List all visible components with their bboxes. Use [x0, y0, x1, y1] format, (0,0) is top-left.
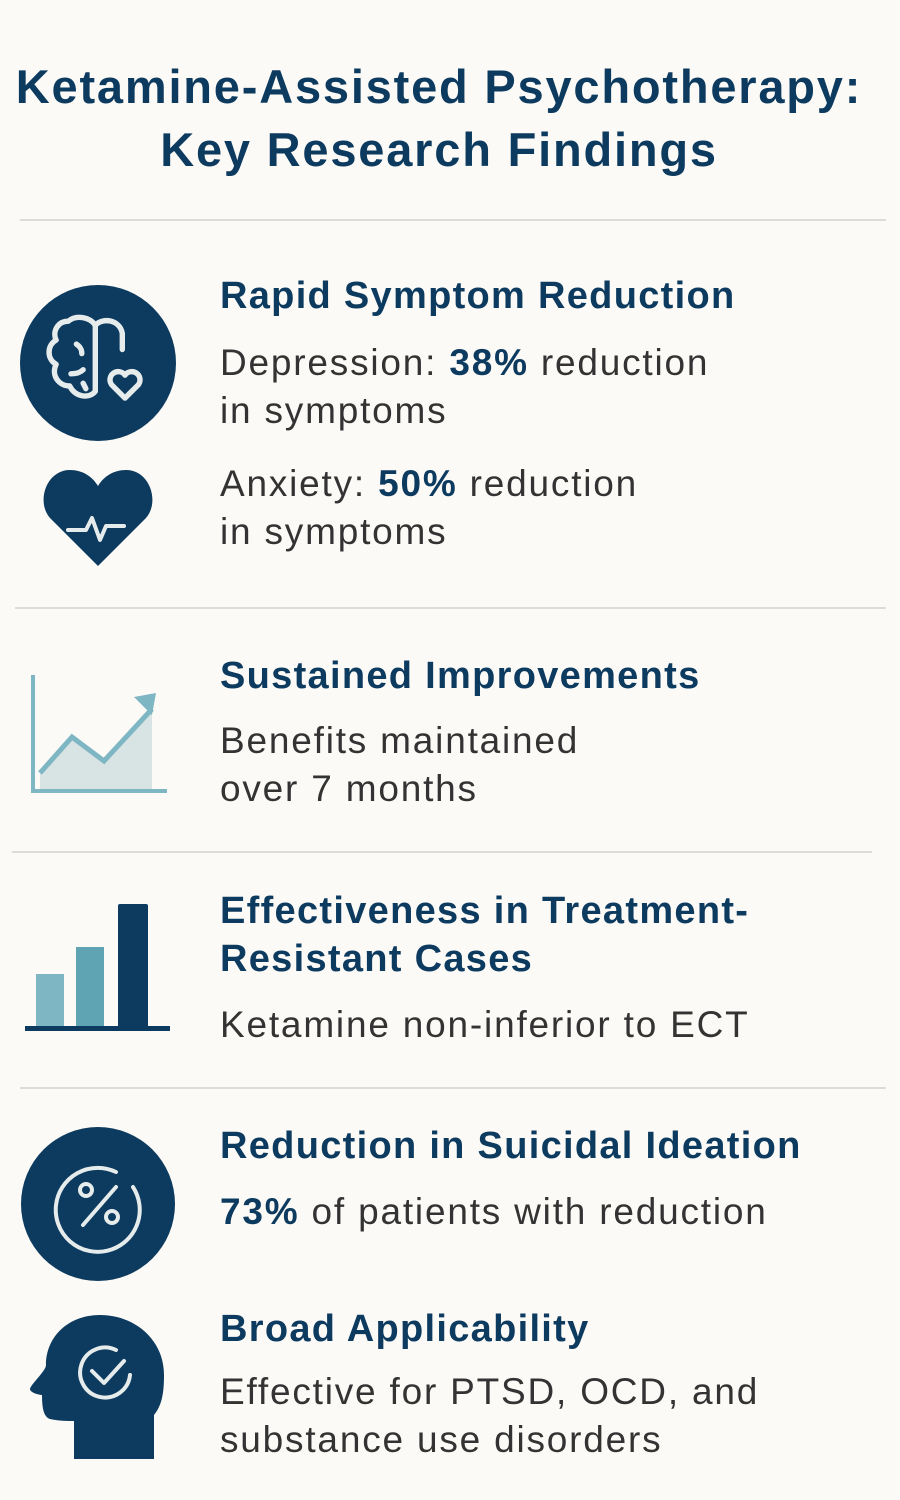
title: Key Research Findings [160, 123, 718, 176]
panel: treatment-resistant: Resistant Cases [220, 938, 533, 980]
icon: line chart [31, 675, 167, 793]
title: Ketamine-Assisted Psychotherapy: [16, 60, 862, 113]
text: in symptoms [220, 390, 447, 431]
text: 73% of patients with reduction [220, 1191, 768, 1232]
title [16, 60, 862, 176]
text: Ketamine non-inferior to ECT [220, 1004, 750, 1045]
icon: head check [30, 1315, 164, 1459]
icon: brain heart circle [20, 285, 176, 441]
text: Effective for PTSD, OCD, and [220, 1371, 759, 1412]
text: in symptoms [220, 511, 447, 552]
icon: percent circle [21, 1127, 175, 1281]
icon: bar chart [25, 904, 170, 1031]
panel: treatment-resistant: Effectiveness in Treatment- [220, 890, 749, 932]
text: substance use disorders [220, 1419, 662, 1460]
panel: rapid symptom reduction: Rapid Symptom Reduction [220, 275, 735, 317]
panel: suicidal ideation: Reduction in Suicidal Ideation [220, 1125, 802, 1167]
text: Depression: 38% reduction [220, 342, 709, 383]
panel: broad applicability: Broad Applicability [220, 1308, 590, 1350]
panel: treatment-resistant [220, 890, 749, 980]
icon: heart pulse [44, 470, 152, 566]
text: Anxiety: 50% reduction [220, 463, 638, 504]
text: Benefits maintained [220, 720, 579, 761]
text: over 7 months [220, 768, 478, 809]
panel: sustained improvements: Sustained Improvements [220, 655, 700, 697]
